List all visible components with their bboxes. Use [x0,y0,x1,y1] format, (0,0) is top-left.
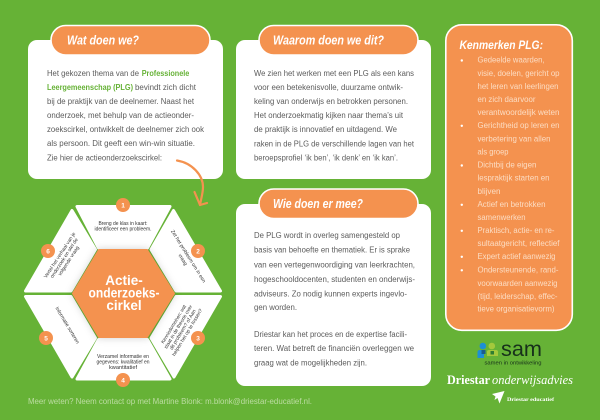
text block: participants: van een vertegenwoordiging van leerkrachten, [254,260,415,270]
bullet markers [461,59,463,271]
number badge 3: 3 [196,335,200,342]
list of characteristics: verbetering van allen [478,135,550,144]
text block: introduction: zoekscirkel, ontwikkelt de deelnemer zich ook [47,125,204,134]
list of characteristics: Gerichtheid op leren en [478,121,560,130]
segment 4: kwantitatief [109,365,138,371]
text block: introduction: als persoon. Dit geeft een win-win situatie. [47,139,195,148]
list of characteristics: Expert actief aanwezig [478,252,556,261]
segment 3: Kennisdomeinen: wat [160,304,188,345]
segment 3: dit probleem? of Aan [169,309,198,351]
text block: introduction [47,69,204,162]
center hexagon: Actie- [105,273,143,288]
text block: participants: teren. Wat betreft de financiën overleggen we [254,344,415,353]
text block: introduction: Professionele [142,69,190,78]
text block: introduction: bij de praktijk van de deelnemer. Naast het [47,97,195,106]
text block: reasons [254,69,415,162]
icon: two people [478,343,498,358]
heading: Wat doen we? [51,26,210,55]
arrow: to the cycle [177,160,207,205]
number badge 1 [116,198,130,212]
number badge 2 [191,244,205,258]
text block: introduction: Zie hier de actieonderzoekscirkel: [47,154,162,162]
logo: sam: samen in ontwikkeling [484,360,542,366]
segment 4: Verzamel informatie en [97,354,149,360]
segment 2 [151,210,220,291]
list of characteristics: lespraktijk starten en [478,174,550,183]
segment 5 [26,296,96,377]
segment 2: vraag [176,253,188,267]
list of characteristics: het leren van leerlingen [478,82,558,91]
list of characteristics: als groep [478,147,509,156]
list of characteristics: visie, doelen, gericht op [478,69,560,78]
list of characteristics: blijven [478,187,500,196]
logo: Driestar educatief: Driestar educatief [507,397,554,403]
logo: Driestar onderwijsadvies: onderwijsadvies [492,373,573,387]
segment 1: Breng de klas in kaart: [98,221,148,227]
heading: Waarom doen we dit? [259,26,418,55]
segment 6: volgende vraag [57,245,81,277]
number badge 6: 6 [46,248,50,255]
text block: participants: graag wat de mogelijkheden zijn. [254,358,367,368]
segment 4 [77,340,170,379]
text block: introduction: bevindt zich dicht [135,83,197,92]
logo: sam [478,338,542,366]
segment 3 [151,296,220,377]
panel: Waarom doen we dit? [236,26,431,179]
text block: participants: De PLG wordt in overleg samengesteld op [254,231,401,240]
list of characteristics [478,56,560,314]
text block: reasons: beroepsprofiel ‘ik ben’, ‘ik denk’ en ‘ik kan’. [254,154,398,162]
number badge 1: 1 [121,202,125,209]
list of characteristics: en zich daarvoor [478,95,536,104]
text block: participants: hogeschooldocenten, studenten en onderwijs- [254,275,415,284]
list of characteristics: Ondersteunende, rand- [478,266,559,275]
segment 2: Zet het probleem om in een [169,229,207,284]
heading: Wat doen we?: Wat doen we? [67,34,139,48]
heading: Wie doen er mee?: Wie doen er mee? [273,197,363,211]
list of characteristics: voorwaarden aanwezig [478,279,558,288]
text block: participants: gen worden. [254,303,297,312]
footer: contact line: Meer weten? Neem contact op met Martine Blonk: m.blonk@driestar-educatief.nl. [28,397,312,406]
list of characteristics: Praktisch, actie- en re- [478,226,555,235]
logo: Driestar onderwijsadvies [447,373,573,387]
panel: Wat doen we? [28,26,223,179]
text block: participants: Driestar kan het proces en de expertise facili- [254,330,407,339]
number badge 4 [116,373,130,387]
center hexagon: cirkel [106,298,142,313]
text block: introduction: Leergemeenschap (PLG) [47,83,133,92]
panel: Kenmerken PLG [446,25,572,330]
text block: reasons: voor een betekenisvolle, duurzame ontwik- [254,83,403,92]
heading: Wie doen er mee? [259,189,418,218]
logo: Driestar onderwijsadvies: Driestar [447,373,490,387]
list of characteristics: samenwerken [478,213,526,222]
text block: participants: adviseurs. Zo nodig kunnen experts ingevlo- [254,290,407,298]
segment 6: Vertel het verhaal van je [43,231,77,280]
number badge 5 [39,331,53,345]
number badge 3 [191,331,205,345]
number badge 2: 2 [196,248,200,255]
text block: reasons: Het onderzoekmatig kijken naar thema’s uit [254,111,404,120]
text block: reasons: keling van onderwijs en betrokken personen. [254,97,408,106]
segment 6 [26,210,96,291]
logo: sam: sam [501,338,542,361]
number badge 6 [41,244,55,258]
list of characteristics: tieve organisatievorm) [478,305,555,314]
logo: Driestar educatief [492,391,554,404]
segment 5: Informatie sorteren [53,306,80,345]
chart: action research cycle [26,198,220,387]
segment 4: gegevens: kwalitatief en [96,360,150,366]
number badge 5: 5 [44,335,48,342]
text block: introduction: onderzoek, met behulp van de actieonder- [47,111,194,120]
panel: Wie doen er mee? [236,189,431,386]
list of characteristics: Dichtbij de eigen [478,161,536,170]
segment 1 [77,206,170,248]
heading: Waarom doen we dit?: Waarom doen we dit? [273,34,384,48]
list of characteristics: Gedeelde waarden, [478,56,544,65]
segment 3: staat in de theorie over [163,304,194,350]
text block: reasons: We zien het werken met een PLG als een kans [254,69,414,78]
text block: reasons: de praktijk is innovatief en uitdagend. We [254,125,398,134]
list of characteristics: Actief en betrokken [478,200,546,209]
list of characteristics: (tijd, leiderschap, effec- [478,292,558,301]
segment 6: onderzoek en stel de [49,237,80,279]
number badge 4: 4 [121,377,125,384]
heading: Kenmerken PLG: Kenmerken PLG: [460,40,543,52]
text block: participants [254,231,415,368]
list of characteristics: verantwoordelijk weten [478,108,560,117]
text block: introduction: Het gekozen thema van de [47,69,140,78]
center hexagon [73,250,174,337]
text block: participants: basis van behoefte en thematiek. Er is sprake [254,246,411,254]
segment 3: helpen het op te lossen? [171,308,204,357]
center hexagon: onderzoeks- [88,286,160,300]
segment 1: identificeer een probleem. [94,226,152,232]
list of characteristics: sultaatgericht, reflectief [478,239,560,248]
text block: reasons: raken in de PLG de verschillende lagen van het [254,140,415,148]
